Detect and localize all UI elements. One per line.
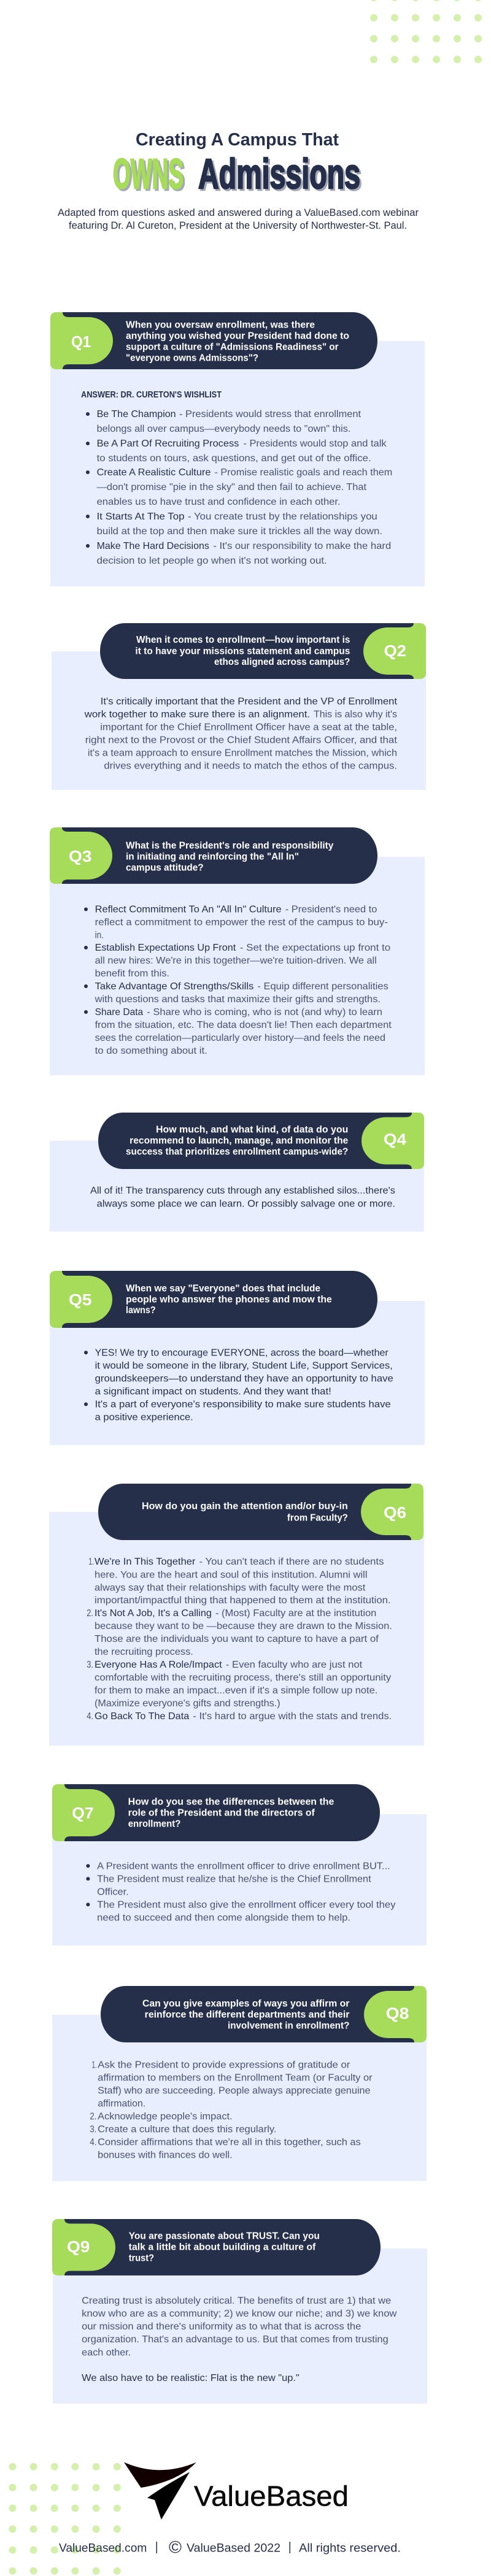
answer list Q7: A President wants the enrollment officer to drive enrollment BUT... xyxy=(97,1861,390,1871)
question pill Q2: Q2 xyxy=(384,642,406,660)
footer: ValueBased.com xyxy=(59,2542,147,2555)
answer list Q6: 4. xyxy=(87,1711,93,1722)
answer list Q3 xyxy=(84,904,392,1056)
answer text Q9: our mission and there's uniformity as to what that is across the xyxy=(82,2321,361,2332)
answer list Q7 xyxy=(86,1861,395,1923)
answer list Q5: It's a part of everyone's responsibility to make sure students have xyxy=(95,1400,391,1409)
title line 2 with shadow: OWNS xyxy=(113,150,184,197)
answer list Q5: a positive experience. xyxy=(95,1412,193,1423)
subtitle: Adapted from questions asked and answered during a ValueBased.com webinar xyxy=(58,207,419,218)
answer list Q5 xyxy=(84,1347,393,1423)
answer list Q6: - It's hard to argue with the stats and trends. xyxy=(193,1711,392,1722)
answer text Q2: important for the Chief Enrollment Officer have a seat at the table, xyxy=(100,723,397,732)
answer list Q7: need to succeed and then come alongside them to help. xyxy=(97,1912,350,1923)
answer list Q8 xyxy=(90,2060,373,2160)
answer list Q3: from the situation, etc. The data doesn't lie! Then each department xyxy=(95,1020,392,1030)
answer list Q6: 3. xyxy=(87,1660,93,1670)
question pill Q2: ethos aligned across campus? xyxy=(214,657,350,667)
question pill Q9: trust? xyxy=(129,2253,154,2263)
answer list Q8: Staff) who are succeeding. People always appreciate genuine xyxy=(98,2085,371,2096)
question pill Q5: When we say "Everyone" does that include xyxy=(126,1283,320,1294)
wishlist bullets: - You create trust by the relationships you xyxy=(188,512,377,522)
footer xyxy=(59,2538,401,2556)
answer list Q6: It's Not A Job, It's a Calling xyxy=(95,1608,212,1619)
question pill Q4: How much, and what kind, of data do you xyxy=(156,1124,348,1135)
question pill Q4: recommend to launch, manage, and monitor the xyxy=(130,1135,349,1146)
wishlist bullets: decision to let people go when it's not working out. xyxy=(97,556,327,566)
answer list Q8: Consider affirmations that we're all in this together, such as xyxy=(98,2137,361,2147)
question pill Q8 xyxy=(101,1986,427,2042)
answer panel Q4 xyxy=(50,1141,424,1232)
answer list Q6: Those are the individuals you want to capture to have a part of xyxy=(95,1634,379,1644)
answer panel Q7 xyxy=(52,1814,427,1945)
question pill Q9: You are passionate about TRUST. Can you xyxy=(129,2231,320,2241)
answer list Q3: Reflect Commitment To An "All In" Culture xyxy=(95,904,282,915)
answer list Q3: to do something about it. xyxy=(95,1046,207,1056)
answer list Q8: affirmation. xyxy=(98,2098,145,2109)
answer list Q3: in. xyxy=(95,930,104,941)
answer list Q8: 2. xyxy=(90,2111,96,2122)
subtitle: featuring Dr. Al Cureton, President at the University of Northwester-St. Paul. xyxy=(69,220,407,231)
answer list Q6: Everyone Has A Role/Impact xyxy=(95,1660,222,1670)
question pill Q5 xyxy=(50,1271,377,1328)
section: Q7 xyxy=(52,1784,427,1945)
answer list Q3: Share Data xyxy=(95,1007,143,1018)
question pill Q1 xyxy=(50,312,377,369)
question pill Q1: anything you wished your President had done to xyxy=(126,331,349,341)
answer list Q7: The President must realize that he/she is the Chief Enrollment xyxy=(97,1874,371,1884)
question pill Q7: role of the President and the directors of xyxy=(128,1807,315,1818)
answer panel Q3 xyxy=(50,857,425,1075)
wishlist bullets: It Starts At The Top xyxy=(97,512,185,522)
logo wordmark: ValueBased xyxy=(194,2480,349,2512)
logo: ValueBased xyxy=(124,2462,349,2520)
wishlist bullets: enables us to have trust and confidence in each other. xyxy=(97,497,341,507)
answer list Q3: - Share who is coming, who is not (and why) to learn xyxy=(147,1007,382,1018)
wishlist bullets: Create A Realistic Culture xyxy=(97,467,211,478)
answer panel Q1 xyxy=(50,341,425,586)
question pill Q7 xyxy=(52,1784,380,1841)
logo mark xyxy=(124,2462,196,2520)
question pill Q5: people who answer the phones and mow the xyxy=(126,1294,332,1305)
answer panel Q6 xyxy=(49,1512,424,1746)
answer list Q8: affirmation to members on the Enrollment Team (or Faculty or xyxy=(98,2072,373,2083)
answer text Q4: always some place we can learn. Or possibly salvage one or more. xyxy=(97,1198,395,1209)
answer list Q5: it would be someone in the library, Student Life, Support Services, xyxy=(95,1360,393,1371)
question pill Q9: Q9 xyxy=(67,2237,90,2256)
question pill Q4: success that prioritizes enrollment campus-wide? xyxy=(126,1146,348,1157)
answer panel Q9 xyxy=(53,2248,427,2404)
answer list Q6: (Maximize everyone's gifts and strengths.) xyxy=(95,1698,280,1709)
question pill Q2: it to have your missions statement and campus xyxy=(135,646,350,656)
question pill Q6: from Faculty? xyxy=(287,1512,348,1523)
section: Q1 xyxy=(50,312,425,586)
section: Q8 xyxy=(52,1986,427,2181)
answer list Q3: - Set the expectations up front to xyxy=(240,943,390,953)
wishlist bullets: Be A Part Of Recruiting Process xyxy=(97,439,239,449)
title line 2 with shadow xyxy=(113,150,360,197)
section: Q3 xyxy=(50,827,425,1075)
answer text Q9: know who are as a community; 2) we know our niche; and 3) we know xyxy=(82,2309,397,2319)
question pill Q5: lawns? xyxy=(126,1305,156,1316)
answer list Q5: a significant impact on students. And they want that! xyxy=(95,1386,331,1397)
answer list Q6: - Even faculty who are just not xyxy=(226,1660,363,1670)
answer list Q6: important/impactful thing that happened to them at the institution. xyxy=(95,1595,391,1606)
answer list Q8: Ask the President to provide expressions of gratitude or xyxy=(98,2060,350,2070)
answer list Q3: all new hires: We're in this together—we're tuition-driven. We all xyxy=(95,956,377,966)
answer panel Q2 xyxy=(52,651,426,790)
answer list Q6: for them to make an impact...even if it's a simple follow up note. xyxy=(95,1685,377,1696)
answer list Q3: Take Advantage Of Strengths/Skills xyxy=(95,981,253,992)
section: Q2 xyxy=(52,623,426,790)
answer list Q8: 1. xyxy=(92,2060,97,2070)
answer text Q2: work together to make sure there is an alignment. xyxy=(84,709,310,719)
question pill Q3: campus attitude? xyxy=(126,862,204,873)
wishlist bullets: - Presidents would stress that enrollment xyxy=(179,409,361,420)
question pill Q4 xyxy=(98,1113,424,1169)
question pill Q3 xyxy=(50,827,377,884)
answer list Q6: comfortable with the recruiting process, there's still an opportunity xyxy=(95,1673,391,1683)
answer list Q6: 2. xyxy=(87,1608,93,1619)
title line 2 with shadow: Admissions xyxy=(198,150,360,197)
answer list Q6: Go Back To The Data xyxy=(95,1711,189,1722)
question pill Q7: How do you see the differences between the xyxy=(128,1796,334,1807)
answer text Q9: each other. xyxy=(82,2347,131,2358)
answer list Q8: 4. xyxy=(90,2137,96,2147)
question pill Q2: When it comes to enrollment—how important is xyxy=(136,635,350,645)
wishlist bullets: Make The Hard Decisions xyxy=(97,541,209,551)
answer list Q6 xyxy=(87,1557,392,1722)
question pill Q1: When you oversaw enrollment, was there xyxy=(126,320,315,330)
answer text Q2: it's a team approach to ensure Enrollment matches the Mission, which xyxy=(88,748,397,758)
answer list Q5: groundskeepers—to understand they have an opportunity to have xyxy=(95,1373,393,1384)
answer list Q3: - Equip different personalities xyxy=(257,981,389,992)
question pill Q8: involvement in enrollment? xyxy=(228,2020,349,2031)
answer list Q5: YES! We try to encourage EVERYONE, across the board—whether xyxy=(95,1347,389,1358)
answer list Q3: Establish Expectations Up Front xyxy=(95,943,236,953)
footer: ValueBased 2022 xyxy=(187,2542,280,2555)
question pill Q7: Q7 xyxy=(72,1804,94,1822)
answer list Q3: sees the correlation—particularly over history—and feels the need xyxy=(95,1033,385,1043)
section: Q5 xyxy=(50,1271,425,1445)
question pill Q9 xyxy=(52,2219,381,2275)
question pill Q1: Q1 xyxy=(71,332,91,351)
answer text Q4 xyxy=(90,1186,395,1209)
answer list Q8: 3. xyxy=(90,2124,96,2134)
answer heading: ANSWER: DR. CURETON'S WISHLIST xyxy=(81,390,222,400)
question pill Q8: Can you give examples of ways you affirm or xyxy=(142,1998,349,2009)
question pill Q5: Q5 xyxy=(69,1290,92,1309)
section: Q6 xyxy=(49,1484,424,1746)
answer list Q7: Officer. xyxy=(97,1887,129,1897)
answer list Q7: The President must also give the enrollment officer every tool they xyxy=(97,1899,395,1910)
question pill Q3: What is the President's role and responsibility xyxy=(126,840,334,851)
wishlist bullets: to students on tours, ask questions, and get out of the office. xyxy=(97,453,371,464)
wishlist bullets: build at the top and then make sure it trickles all the way down. xyxy=(97,526,382,537)
section: Q9 xyxy=(52,2219,427,2404)
title xyxy=(113,130,360,197)
answer list Q3: with questions and tasks that maximize their gifts and strengths. xyxy=(95,994,381,1005)
wishlist bullets: belongs all over campus—everybody needs to "own" this. xyxy=(97,424,350,434)
answer list Q6: the recruiting process. xyxy=(95,1647,193,1657)
answer list Q6: here. You are the heart and soul of this institution. Alumni will xyxy=(95,1570,367,1580)
question pill Q4: Q4 xyxy=(384,1130,407,1149)
question pill Q8: reinforce the different departments and their xyxy=(145,2009,349,2020)
question pill Q2 xyxy=(100,623,426,679)
answer list Q6: - (Most) Faculty are at the institution xyxy=(215,1608,376,1619)
answer list Q6: always say that their relationships with faculty were the most xyxy=(95,1582,366,1593)
subtitle xyxy=(58,207,419,231)
title line 1: Creating A Campus That xyxy=(136,130,339,150)
footer: All rights reserved. xyxy=(299,2542,401,2555)
decorative dots: top right xyxy=(370,0,482,63)
decorative dots: bottom left xyxy=(9,2463,121,2575)
question pill Q6: Q6 xyxy=(384,1503,406,1522)
answer list Q8: Acknowledge people's impact. xyxy=(98,2111,233,2122)
question pill Q6 xyxy=(98,1484,423,1540)
answer text Q9: Creating trust is absolutely critical. The benefits of trust are 1) that we xyxy=(82,2296,391,2306)
wishlist bullets: - Promise realistic goals and reach them xyxy=(215,467,392,478)
answer list Q3: - President's need to xyxy=(285,904,377,915)
answer text Q2: It's critically important that the President and the VP of Enrollment xyxy=(101,696,398,707)
answer text Q9: We also have to be realistic: Flat is the new "up." xyxy=(82,2373,300,2383)
answer list Q6: - You can't teach if there are no students xyxy=(199,1557,384,1567)
answer list Q3: reflect a commitment to empower the rest of the campus to buy- xyxy=(95,918,388,928)
answer text Q9: organization. That's an advantage to us. But that comes from trusting xyxy=(82,2334,389,2345)
answer panel Q5 xyxy=(50,1301,425,1445)
footer: © xyxy=(169,2538,182,2556)
answer list Q8: Create a culture that does this regularly. xyxy=(98,2124,276,2134)
answer list Q6: 1. xyxy=(88,1557,94,1567)
wishlist bullets xyxy=(86,409,392,566)
answer list Q6: because they want to be —because they are drawn to the Mission. xyxy=(95,1621,392,1631)
wishlist bullets: —don't promise "pie in the sky" and then fail to achieve. That xyxy=(97,482,367,493)
section: Q4 xyxy=(50,1113,424,1232)
answer text Q4: All of it! The transparency cuts through any established silos...there's xyxy=(90,1186,395,1196)
question pill Q3: Q3 xyxy=(69,847,92,865)
question pill Q1: "everyone owns Admissons"? xyxy=(126,353,258,363)
answer text Q2: right next to the Provost or the Chief Student Affairs Officer, and that xyxy=(85,735,398,746)
answer text Q2 xyxy=(84,696,398,772)
question pill Q8: Q8 xyxy=(386,2004,409,2023)
question pill Q6: How do you gain the attention and/or buy-in xyxy=(142,1501,348,1511)
question pill Q9: talk a little bit about building a culture of xyxy=(129,2242,316,2252)
answer list Q8: bonuses with finances do well. xyxy=(98,2150,233,2160)
wishlist bullets: - It's our responsibility to make the hard xyxy=(213,541,391,551)
question pill Q1: support a culture of "Admissions Readiness" or xyxy=(126,342,339,352)
answer panel Q8 xyxy=(52,2015,427,2181)
answer list Q3: benefit from this. xyxy=(95,968,169,979)
answer text Q2: This is also why it's xyxy=(314,709,397,719)
question pill Q7: enrollment? xyxy=(128,1819,180,1829)
answer text Q2: drives everything and it needs to match the ethos of the campus. xyxy=(104,761,397,772)
wishlist bullets: - Presidents would stop and talk xyxy=(243,439,387,449)
wishlist bullets: Be The Champion xyxy=(97,409,176,420)
answer text Q9 xyxy=(82,2296,397,2383)
answer list Q6: We're In This Together xyxy=(95,1557,196,1567)
question pill Q3: in initiating and reinforcing the "All In" xyxy=(126,852,299,862)
